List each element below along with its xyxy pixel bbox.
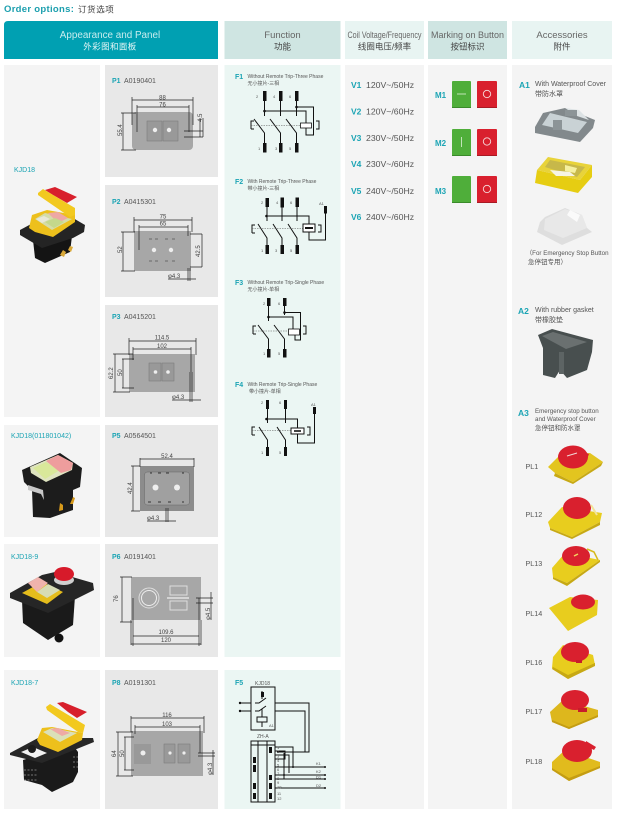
diagram: F2: 2	[261, 200, 264, 205]
diagram: F2: 3	[275, 248, 278, 253]
accessory: A3: and Waterproof Cover	[535, 416, 596, 423]
button set: M1	[435, 81, 497, 108]
diagram: F1: 2	[256, 94, 259, 99]
diagram: F5 wiring: 7	[277, 771, 280, 776]
panel: KJD18(011801042): KJD18(011801042)	[11, 433, 71, 440]
panel: P5: 52.4	[161, 454, 173, 460]
panel: P1: 88	[159, 96, 166, 102]
accessory: PL12: PL12	[526, 510, 542, 519]
diagram: F2: With Remote Trip-Three Phase	[248, 179, 317, 185]
panel: P5	[105, 425, 218, 537]
panel: P2: P2	[112, 199, 121, 206]
accessory: A3: Emergency stop button	[535, 408, 599, 415]
header: coil voltage	[345, 21, 424, 59]
accessory: PL14	[526, 594, 598, 631]
accessory: A2: A2	[518, 306, 529, 316]
diagram: F1: 1	[258, 146, 261, 151]
accessory: A2	[518, 306, 594, 378]
diagram: F2: 5	[290, 248, 293, 253]
panel: P8: φ4.3	[208, 762, 214, 775]
header: appearance and panel: 外彩图和面板	[83, 42, 137, 52]
header: marking on button: 按钮标识	[450, 42, 485, 52]
panel: function F1-F4	[224, 65, 340, 657]
diagram: F1: 5	[289, 146, 292, 151]
diagram: F1: 6	[289, 94, 292, 99]
diagram: F3: Without Remote Trip-Single Phase	[248, 280, 324, 286]
diagram: F2: 4	[276, 200, 279, 205]
diagram: F3: 6	[278, 301, 281, 306]
diagram: F1: 3	[275, 146, 278, 151]
diagram: F4: F4	[235, 382, 243, 389]
panel: coil voltage list: 120V~/50Hz	[366, 80, 414, 90]
diagram: F2: 带小撞片-三相	[248, 185, 279, 192]
panel: function F5: KJD18	[255, 681, 270, 687]
panel: KJD18-7: KJD18-7	[11, 680, 38, 687]
header: accessories	[512, 21, 612, 59]
panel: P2: 65	[160, 222, 167, 228]
panel: P6: φ4.5	[206, 607, 212, 620]
panel: P1: 76	[159, 102, 166, 108]
header: marking on button	[428, 21, 507, 59]
accessory: PL1: PL1	[526, 462, 538, 471]
button set: M3: M3	[435, 187, 447, 196]
accessory: A3: A3	[518, 408, 529, 418]
accessory: PL18	[526, 740, 600, 781]
diagram: F4: A1	[311, 402, 317, 407]
diagram: F5 wiring: K2	[316, 769, 322, 774]
diagram: F3	[235, 280, 324, 358]
diagram: F2	[235, 179, 327, 254]
panel: coil voltage list	[345, 65, 424, 809]
panel: P3: 114.5	[155, 336, 170, 342]
panel: coil voltage list: V4	[351, 159, 362, 169]
panel: P3: A0415201	[124, 314, 156, 321]
diagram: F5 wiring: 3	[277, 754, 280, 758]
accessory: A1: 带防水罩	[535, 89, 563, 98]
panel: P3: φ4.3	[172, 395, 185, 401]
header: function	[224, 21, 340, 59]
panel: coil voltage list: V1	[351, 80, 362, 90]
accessory: PL16	[526, 642, 595, 679]
panel: KJD18	[4, 65, 100, 417]
diagram: F5 wiring: 9	[277, 780, 280, 785]
header: accessories: Accessories	[536, 30, 588, 41]
accessory: PL13	[526, 546, 600, 586]
diagram: F1: Without Remote Trip-Three Phase	[248, 74, 324, 80]
header: coil voltage: Coil Voltage/Frequency	[348, 30, 422, 41]
panel: P3: 50	[118, 369, 124, 376]
panel: coil voltage list: V3	[351, 133, 362, 143]
panel: P5: P5	[112, 433, 121, 440]
panel: P6	[105, 544, 218, 657]
panel: P3: P3	[112, 314, 121, 321]
photo: KJD18 switch	[20, 187, 85, 263]
button set: M2	[435, 129, 497, 156]
panel: P6: 120	[161, 638, 172, 644]
diagram: F2: A1	[319, 201, 325, 206]
diagram: F5 wiring: 4	[277, 758, 280, 763]
accessory: PL18: PL18	[526, 757, 542, 766]
diagram: F2: F2	[235, 179, 243, 186]
panel: P8: 50	[120, 750, 126, 757]
accessory: A1: 急停钮专用）	[528, 257, 567, 266]
panel: P6: 76	[114, 595, 120, 602]
header: function: Function	[264, 30, 301, 41]
diagram: F4: 2	[261, 400, 264, 405]
panel: P8: 64	[112, 750, 118, 757]
diagram: F4: 1	[261, 450, 264, 455]
accessory: A3: 急停钮和防水罩	[535, 423, 581, 432]
diagram: F4: With Remote Trip-Single Phase	[248, 382, 317, 388]
diagram: F1	[235, 74, 324, 152]
diagram: F4: 带小撞片-单相	[249, 388, 281, 395]
accessory: A2: 带橡胶垫	[535, 315, 563, 324]
diagram: F5 wiring: A1	[269, 723, 275, 728]
diagram: F1: 4	[273, 94, 276, 99]
panel: P2: 52	[118, 246, 124, 253]
panel: P8: A0191301	[124, 680, 156, 687]
title: 订货选项	[78, 4, 114, 14]
panel: P2: 42.5	[196, 245, 202, 257]
panel: P1	[105, 65, 218, 177]
diagram: F3: F3	[235, 280, 243, 287]
panel: marking on button	[428, 65, 507, 809]
diagram: F2: 6	[290, 200, 293, 205]
header: coil voltage: 线圈电压/频率	[358, 42, 412, 52]
diagram: F5 wiring: 1	[277, 745, 280, 750]
panel: P3: 62.2	[109, 367, 115, 379]
accessory: PL14: PL14	[526, 609, 542, 618]
panel: P1: P1	[112, 78, 121, 85]
panel: KJD18(011801042)	[4, 425, 100, 537]
panel: P8	[105, 670, 218, 809]
panel: P8: 116	[162, 713, 172, 719]
panel: P1: A0190401	[124, 78, 156, 85]
accessory: A1: （For Emergency Stop Button	[526, 250, 609, 257]
panel: P1: 4.5	[198, 113, 204, 122]
diagram: F3: 1	[263, 351, 266, 356]
diagram: F5 wiring: 6	[277, 767, 280, 772]
panel: KJD18-9	[4, 544, 100, 657]
panel: P3	[105, 305, 218, 417]
accessory: A1: A1	[519, 80, 530, 90]
panel: P5: A0564501	[124, 433, 156, 440]
diagram: F4: 6	[279, 400, 282, 405]
title	[4, 4, 114, 15]
panel: P6: A0191401	[124, 554, 156, 561]
photo: KJD18 compact switch	[22, 453, 82, 518]
photo: KJD18-9 switch	[10, 567, 94, 642]
panel: coil voltage list: 230V~/60Hz	[366, 159, 414, 169]
diagram: F5 wiring: 11	[277, 791, 282, 796]
accessory: PL13: PL13	[526, 559, 542, 568]
diagram: F4	[235, 382, 317, 456]
diagram: F5 wiring: 10	[277, 784, 282, 790]
diagram: F4: 5	[279, 450, 282, 455]
panel: function F5: ZH-A	[257, 734, 269, 740]
accessory: PL17	[526, 690, 598, 729]
diagram: F1: 无小撞片-三相	[248, 80, 279, 87]
diagram: F5 wiring: 12	[277, 796, 282, 801]
panel: P2: φ4.3	[168, 274, 181, 280]
panel: P5: φ4.3	[147, 516, 160, 522]
panel: KJD18-7	[4, 670, 100, 809]
header: appearance and panel: Appearance and Panel	[60, 30, 160, 41]
button set: M2: M2	[435, 139, 447, 148]
panel: P2: A0415301	[124, 199, 156, 206]
panel: function F5	[224, 670, 340, 809]
accessory: A1: With Waterproof Cover	[535, 81, 607, 88]
panel: coil voltage list: 240V~/50Hz	[366, 186, 414, 196]
panel: P6: 109.6	[158, 630, 174, 636]
button set: M3	[435, 176, 497, 203]
button set: M1: M1	[435, 91, 447, 100]
accessory: PL17: PL17	[526, 707, 542, 716]
diagram: F5 wiring: 8	[277, 776, 280, 781]
panel: KJD18-9: KJD18-9	[11, 554, 38, 561]
photo: KJD18-7 switch	[10, 702, 94, 792]
panel: coil voltage list: 240V~/60Hz	[366, 212, 414, 222]
panel: coil voltage list: 230V~/50Hz	[366, 133, 414, 143]
panel: function F5: F5	[235, 680, 243, 687]
title: Order options:	[4, 4, 74, 15]
diagram: F3: 5	[278, 351, 281, 356]
accessory: A1	[519, 80, 609, 266]
accessory: A2: With rubber gasket	[535, 307, 594, 314]
accessory: PL12	[526, 497, 602, 539]
diagram: F5 wiring: K1	[316, 761, 322, 766]
panel: P5: 42.4	[128, 482, 134, 494]
panel: P2	[105, 185, 218, 297]
diagram: F5 wiring: 2	[277, 749, 280, 754]
accessory: PL16: PL16	[526, 658, 542, 667]
diagram: F5 wiring: 5	[277, 762, 280, 768]
panel: coil voltage list: V5	[351, 186, 362, 196]
accessory: PL1	[526, 446, 603, 484]
diagram: F5 wiring: D1	[316, 774, 322, 780]
diagram: F3: 2	[263, 301, 266, 306]
diagram: F2: 1	[261, 248, 264, 253]
accessory: A3	[518, 408, 599, 432]
panel: P8: P8	[112, 680, 121, 687]
diagram: F1: F1	[235, 74, 243, 81]
header: accessories: 附件	[553, 42, 571, 52]
panel: P1: 55.4	[118, 124, 124, 136]
diagram: F5 wiring	[239, 687, 326, 802]
header: marking on button: Marking on Button	[431, 30, 504, 41]
header: appearance and panel	[4, 21, 218, 59]
panel: P6: P6	[112, 554, 121, 561]
diagram: F5 wiring: D2	[316, 783, 322, 788]
panel: coil voltage list: V6	[351, 212, 362, 222]
diagram: F3: 无小撞片-单相	[248, 286, 279, 293]
panel: coil voltage list: V2	[351, 106, 362, 116]
panel: P8: 103	[162, 722, 173, 728]
panel: coil voltage list: 120V~/60Hz	[366, 106, 414, 116]
panel: KJD18: KJD18	[14, 167, 35, 174]
panel: P3: 102	[157, 344, 168, 350]
panel: P2: 75	[160, 214, 167, 220]
panel: accessories	[512, 65, 612, 809]
header: function: 功能	[274, 42, 291, 52]
